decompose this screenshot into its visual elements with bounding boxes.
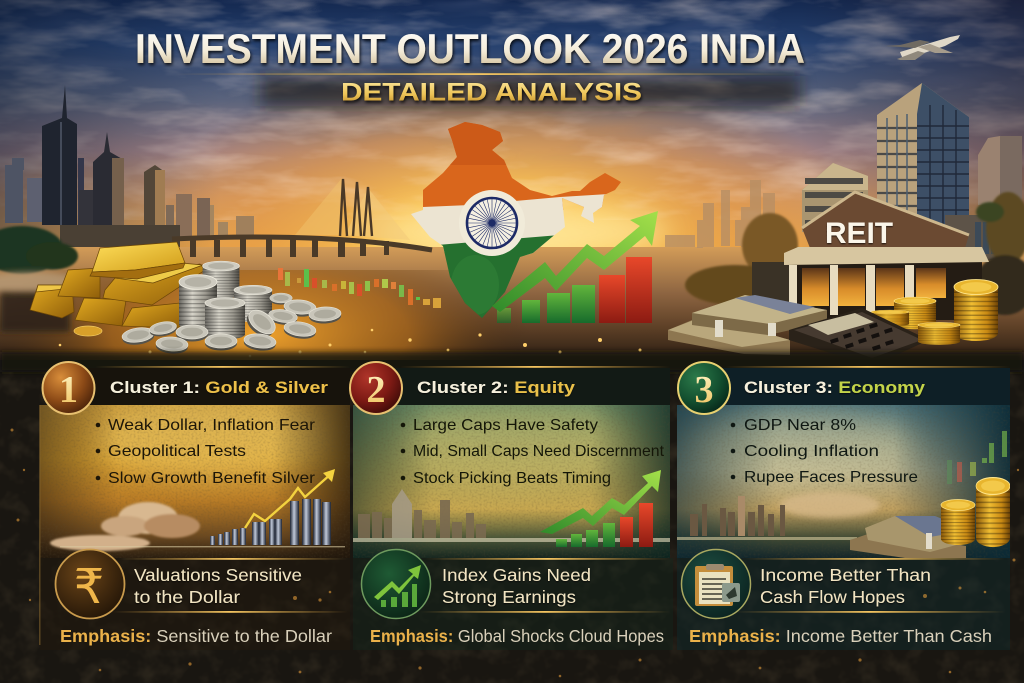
panel 1 emphasis: Emphasis: Sensitive to the Dollar — [60, 626, 332, 646]
clouds — [780, 492, 880, 518]
panel 1 bullets: Geopolitical Tests — [108, 443, 246, 460]
panel 2 bullets: Stock Picking Beats Timing — [413, 470, 611, 487]
panel 3 body — [677, 405, 1010, 558]
gold bars — [30, 242, 205, 336]
panel 3 bullets: Rupee Faces Pressure — [744, 469, 918, 486]
left city skyline — [5, 85, 254, 247]
icon: clipboard — [682, 550, 750, 618]
bars — [556, 539, 567, 547]
panel 1 callout text: Valuations Sensitive — [134, 565, 302, 585]
clouds — [50, 502, 200, 551]
panel 1 header — [70, 368, 350, 405]
panel 2 header — [380, 368, 670, 405]
panel 1 heading: Cluster 1: Gold & Silver — [110, 378, 328, 397]
panel 3 callout lines — [735, 558, 1005, 613]
panel 3 header — [705, 368, 1010, 405]
badge 3 — [678, 362, 730, 414]
badge 1: 1 — [59, 369, 78, 411]
icon: growth chart — [362, 550, 430, 618]
panel 2 callout text: Index Gains Need — [442, 565, 591, 585]
panel 2 bullets — [401, 417, 665, 487]
panel 1 callout lines — [112, 558, 348, 613]
candlesticks — [947, 431, 1007, 484]
foliage left — [0, 226, 85, 332]
panel 2 emphasis: Emphasis: Global Shocks Cloud Hopes — [370, 626, 664, 646]
skyline — [358, 489, 486, 538]
lower section background — [0, 352, 1024, 683]
panel 2 bullets: Large Caps Have Safety — [413, 417, 598, 434]
sea link bridge — [172, 178, 432, 257]
main title: INVESTMENT OUTLOOK 2026 INDIA — [135, 25, 805, 72]
panel 1 bullets: Slow Growth Benefit Silver — [108, 470, 316, 487]
panel 3 emphasis: Emphasis: Income Better Than Cash — [689, 626, 992, 646]
panel 2 callout lines — [420, 558, 670, 613]
panel 3 callout text: Income Better Than — [760, 565, 931, 585]
icon: rupee coin — [56, 550, 124, 618]
panel 3 bullets — [731, 417, 918, 486]
gold coin stack behind calculator — [871, 297, 936, 329]
cash bundles — [850, 534, 966, 558]
silver coins — [121, 261, 341, 355]
calculator — [789, 308, 929, 366]
gold coin stacks — [918, 280, 998, 345]
badge 1 — [42, 362, 94, 414]
back towers — [802, 83, 1022, 260]
India map with tricolor flag — [411, 122, 621, 318]
coins — [941, 499, 975, 545]
yellow arrow — [245, 473, 332, 528]
candlestick strip — [278, 268, 441, 308]
panel 1 bullets — [96, 417, 316, 487]
panel 1 callout text — [134, 565, 302, 607]
panel 2 heading: Cluster 2: Equity — [417, 378, 576, 397]
REIT sign: REIT — [825, 217, 893, 250]
Ashoka chakra — [459, 190, 525, 256]
panel 2 body — [353, 403, 670, 558]
panel 3 callout text — [760, 565, 931, 607]
portico beam — [784, 247, 989, 265]
bar stacks — [210, 499, 331, 545]
growth bars and arrow — [492, 211, 658, 323]
cash bundles — [668, 295, 827, 355]
icon: rupee coin: ₹ — [74, 559, 104, 615]
panel 1 callout text: to the Dollar — [134, 587, 240, 607]
panel: cluster 2 equity — [350, 362, 670, 646]
panel 1 bullets: Weak Dollar, Inflation Fear — [108, 417, 316, 434]
badge 2 — [350, 362, 402, 414]
panel 1 body — [40, 398, 350, 558]
panel 2 callout text: Strong Earnings — [442, 587, 576, 607]
badge 3: 3 — [694, 369, 714, 411]
panel 3 bullets: Cooling Inflation — [744, 443, 879, 460]
REIT building — [752, 192, 989, 320]
hero background scene — [0, 0, 1024, 360]
panel 3 bullets: GDP Near 8% — [744, 417, 856, 434]
panel: cluster 3 economy — [677, 362, 1010, 646]
panel 3 heading: Cluster 3: Economy — [744, 378, 926, 397]
columns — [789, 265, 914, 315]
panel 2 callout text — [442, 565, 591, 607]
lit windows — [802, 268, 946, 306]
skyline — [690, 496, 785, 536]
panel: cluster 1 gold and silver — [39, 362, 350, 646]
title banner — [135, 25, 805, 106]
gable roof — [802, 192, 969, 248]
right distant skyline — [665, 180, 775, 248]
airplane — [885, 35, 960, 60]
arrow — [540, 470, 661, 534]
foliage right — [685, 192, 1024, 315]
panel 2 bullets: Mid, Small Caps Need Discernment — [413, 443, 665, 460]
horizon line — [60, 546, 345, 547]
panel 3 callout text: Cash Flow Hopes — [760, 587, 905, 607]
subtitle: DETAILED ANALYSIS — [341, 78, 642, 106]
panel 1 frame — [39, 405, 40, 645]
badge 2: 2 — [366, 369, 386, 411]
